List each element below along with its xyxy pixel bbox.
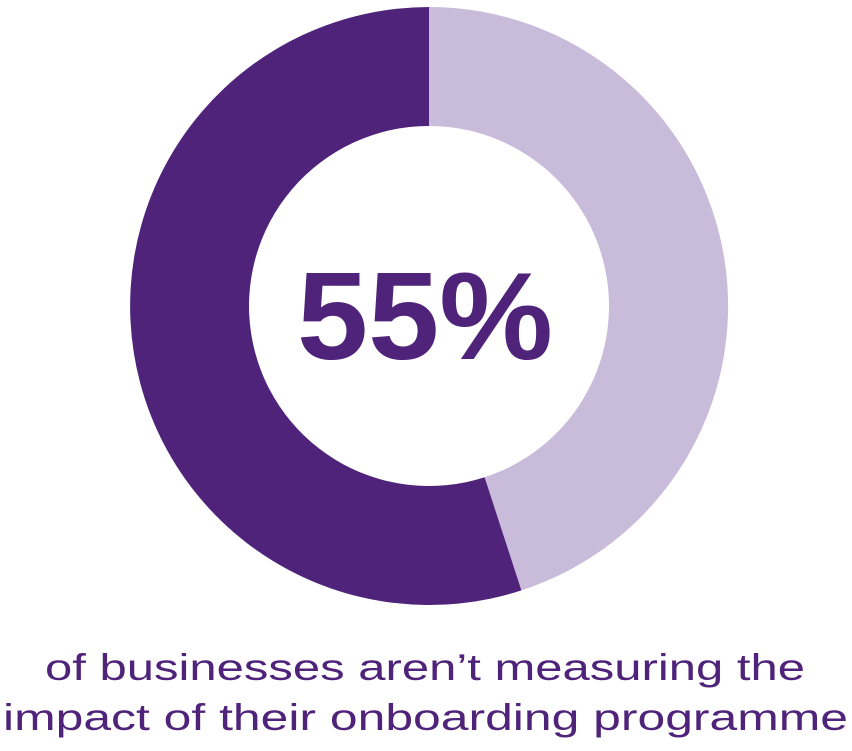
caption: impact of their onboarding programme bbox=[3, 697, 848, 738]
center value: 55% bbox=[297, 248, 553, 386]
caption: of businesses aren’t measuring the bbox=[45, 647, 805, 688]
segment: 55% dark bbox=[130, 7, 521, 605]
segment: 45% light bbox=[429, 7, 728, 590]
donut chart bbox=[130, 7, 728, 605]
caption bbox=[3, 647, 848, 738]
